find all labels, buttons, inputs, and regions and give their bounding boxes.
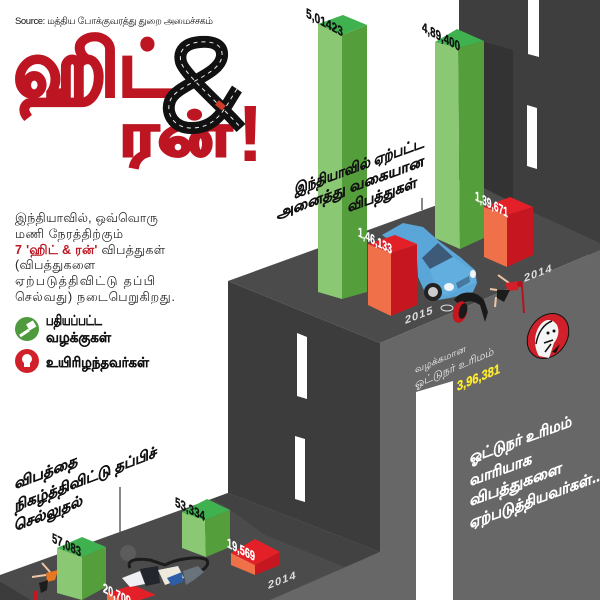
intro text: (விபத்துகளை (15, 258, 96, 273)
back building (459, 0, 600, 262)
licence label: வழக்கமான (415, 344, 466, 376)
bar: 2014 deaths: 1,39,671 (475, 189, 508, 221)
title: run: ரன் (119, 101, 232, 168)
lower road surface (0, 493, 380, 600)
source: Source: மத்திய போக்குவரத்து துறை அமைச்சகம் (15, 16, 213, 28)
heading: hit and run: விபத்தை (15, 452, 79, 494)
crashed scooter (120, 545, 208, 587)
intro text: 7 'ஹிட் & ரன்' விபத்துகள் (15, 243, 166, 258)
icon: road ampersand (169, 42, 241, 128)
car (382, 223, 477, 301)
text: licence board: ஓட்டுநர் உரிமம் (470, 413, 572, 468)
heading: hit and run: நிகழ்த்திவிட்டு தப்பிச் (14, 444, 157, 516)
title: exclamation: ! (237, 89, 264, 178)
logo (519, 305, 577, 367)
intro text: செல்வது) நடைபெறுகிறது. (15, 290, 175, 305)
text: licence board: வாரியாக (470, 451, 532, 490)
legend: cases (15, 312, 111, 347)
text: licence board (470, 413, 600, 533)
crashed motorcycle (441, 292, 488, 324)
bar: 2014 deaths (475, 189, 533, 267)
heading: hit and run: செல்லுதல் (15, 492, 83, 536)
person lower left (32, 563, 58, 600)
fallen person (490, 275, 524, 313)
heading: all accidents: விபத்துகள் (348, 174, 417, 217)
heading: all accidents: அனைத்து வகையான (277, 153, 424, 224)
bar: lower cases 2014: 53,334 (175, 495, 205, 525)
bar: 2015 deaths: 1,46,133 (358, 225, 392, 258)
intro text: மணி நேரத்திற்கும் (15, 227, 123, 242)
legend: cases: பதியப்பட்ட (46, 312, 103, 330)
legend: cases: வழக்குகள் (46, 329, 111, 347)
year 2014 lower: 2014 (268, 569, 296, 592)
bar: 2015 deaths (358, 225, 417, 316)
legend: deaths: உயிரிழந்தவர்கள் (46, 354, 149, 372)
bar: lower cases 2014 (175, 495, 230, 557)
bar: lower cases 2015: 57,083 (52, 531, 81, 561)
bar: 2015 cases: 5,01423 (306, 6, 343, 40)
intro text (15, 211, 175, 305)
year 2014: 2014 (524, 262, 552, 285)
year 2015: 2015 (405, 304, 433, 327)
bar: lower deaths 2014: 19,569 (227, 536, 255, 565)
bar: 2014 cases (422, 20, 484, 249)
intro text: ஏற்படுத்திவிட்டு தப்பி (15, 274, 155, 288)
text: licence board: விபத்துகளை (470, 460, 563, 511)
upper road surface (228, 188, 600, 343)
title: hit: ஹிட் (14, 27, 176, 119)
licence number: 3,96,381 (457, 360, 500, 394)
legend: deaths (15, 349, 149, 373)
bar: 2014 cases: 4,89,400 (422, 20, 460, 55)
heading: all accidents: இந்தியாவில் ஏற்பட்ட (294, 134, 425, 199)
building right face (270, 250, 600, 600)
bar: lower cases 2015 (52, 531, 106, 600)
licence label: ஓட்டுநர் உரிமம் (415, 346, 494, 391)
intro text: இந்தியாவில், ஒவ்வொரு (15, 211, 158, 226)
building left face (228, 281, 380, 552)
bar: 2015 cases (306, 6, 367, 299)
